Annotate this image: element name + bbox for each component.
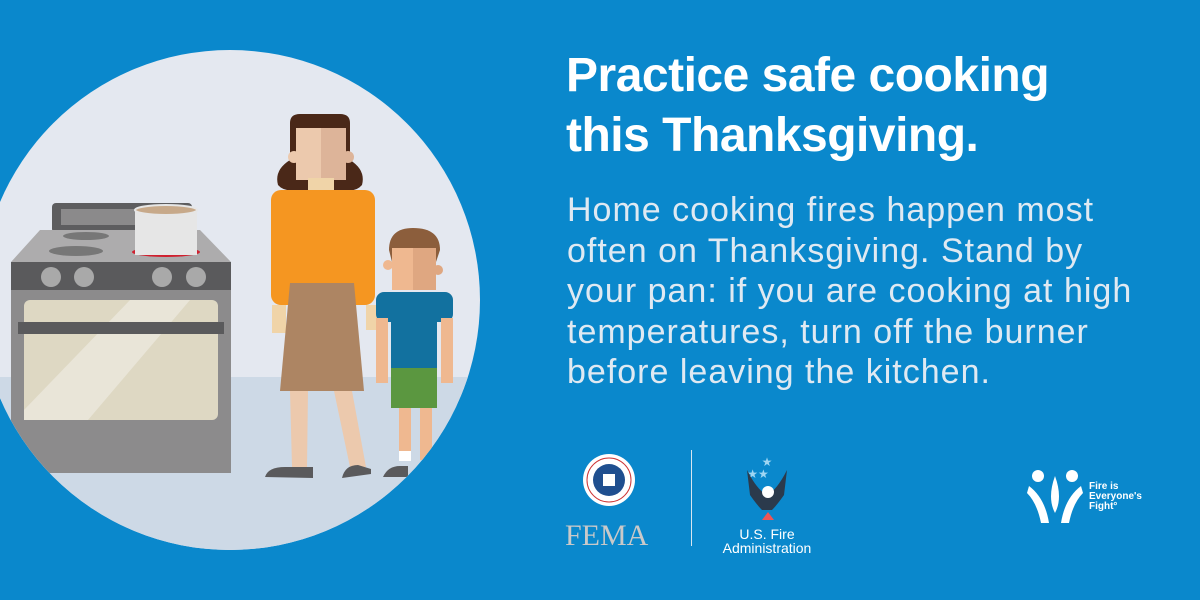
title (566, 49, 1049, 162)
illustration: kitchen scene (0, 50, 480, 550)
logo: US Fire Administration: ★ (762, 455, 772, 469)
logo: Fire is Everyone's Fight: Fight° (1089, 501, 1117, 512)
body text: Home cooking fires happen most (567, 191, 1094, 229)
body text: before leaving the kitchen. (567, 353, 991, 391)
logo: FEMA (565, 454, 648, 552)
title: this Thanksgiving. (566, 109, 978, 162)
logo: Fire is Everyone's Fight (1027, 470, 1142, 523)
title: Practice safe cooking (566, 49, 1049, 102)
woman (265, 114, 378, 478)
body text: your pan: if you are cooking at high (567, 272, 1132, 310)
logo: US Fire Administration: ★★ (747, 467, 769, 481)
logo: US Fire Administration: Administration (723, 540, 811, 556)
pot (132, 205, 200, 257)
logo: FEMA: FEMA (565, 519, 648, 552)
stove (11, 203, 231, 473)
body text: temperatures, turn off the burner (567, 312, 1089, 350)
body text (567, 191, 1132, 391)
logo: Fire is Everyone's Fight: Fire is (1089, 481, 1118, 492)
divider (691, 450, 692, 546)
logo: US Fire Administration: U.S. Fire (739, 526, 795, 542)
logo: US Fire Administration (722, 455, 811, 556)
boy (376, 228, 453, 477)
body text: often on Thanksgiving. Stand by (567, 232, 1083, 270)
logo: Fire is Everyone's Fight: Everyone's (1089, 491, 1142, 502)
